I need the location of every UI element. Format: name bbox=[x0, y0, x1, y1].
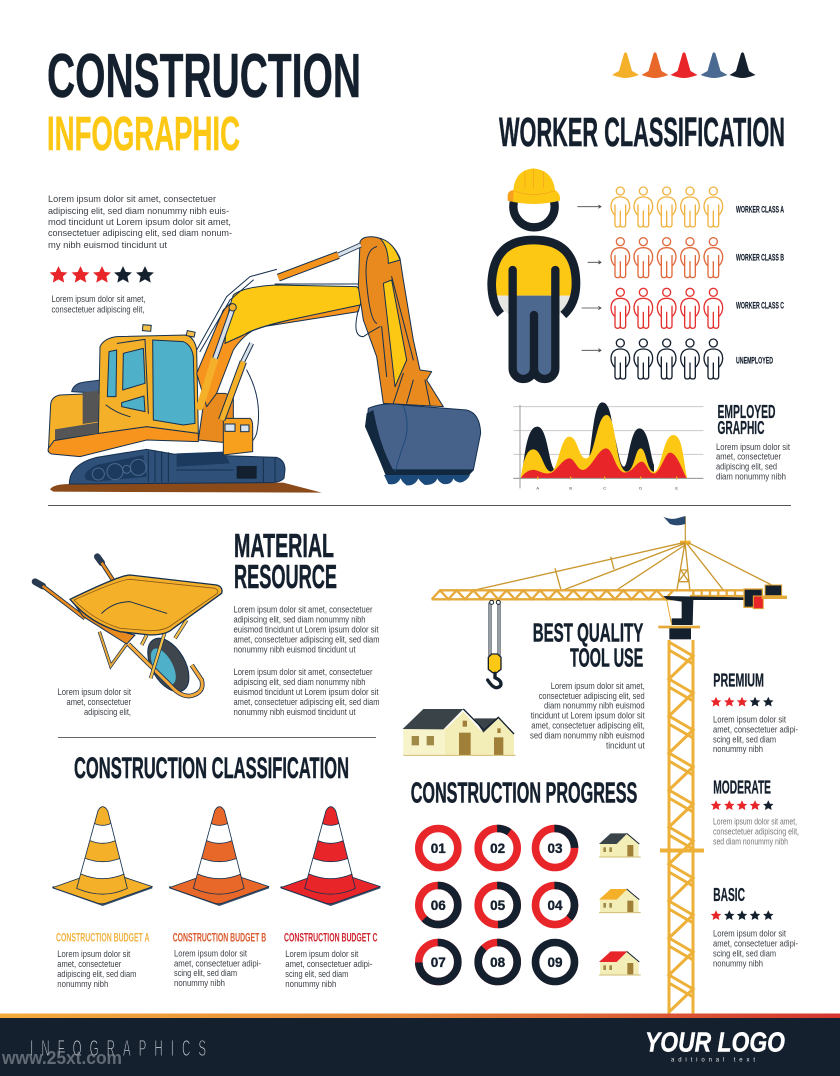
icon: cone budget b bbox=[169, 807, 269, 906]
column: construction budget c bbox=[284, 930, 378, 989]
panel: moderate rating: consectetuer adipiscing elit, bbox=[713, 827, 799, 837]
heading: employed graphic bbox=[718, 402, 776, 438]
chart: employed area graph bbox=[513, 402, 703, 490]
text: employed graphic description bbox=[716, 442, 790, 482]
watermark: www.25xt.com bbox=[1, 1047, 122, 1068]
panel: moderate rating: Lorem ipsum dolor sit amet, bbox=[713, 817, 797, 827]
text: material resource description: adipiscing elit, sed diam nonummy nibh bbox=[234, 677, 366, 687]
illustration: worker figure bbox=[492, 168, 576, 379]
panel: basic rating: nonummy nibh bbox=[713, 959, 763, 969]
text: wheelbarrow caption: amet, consectetuer bbox=[66, 697, 131, 707]
text: material resource description: Lorem ipsum dolor sit amet, consectetuer bbox=[234, 604, 372, 614]
panel: moderate rating: MODERATE bbox=[713, 777, 771, 797]
heading: best quality tool use bbox=[533, 618, 643, 673]
text: wheelbarrow caption: Lorem ipsum dolor sit bbox=[58, 687, 131, 697]
rating caption: consectetuer adipiscing elit, bbox=[52, 304, 144, 314]
panel: premium rating: scing elit, sed diam bbox=[713, 734, 776, 744]
intro text block bbox=[48, 194, 232, 250]
text: material resource description: Lorem ipsum dolor sit amet, consectetuer bbox=[234, 667, 372, 677]
panel: premium rating: amet, consectetuer adipi- bbox=[713, 724, 798, 734]
text: material resource description: nonummy nibh euismod tincidunt ut bbox=[234, 707, 356, 717]
heading: material resource: RESOURCE bbox=[234, 558, 337, 595]
chart: employed area graph: E bbox=[675, 485, 678, 490]
icon: house with red roof bbox=[599, 951, 641, 975]
illustration: tower crane bbox=[432, 516, 787, 1014]
column: construction budget c: CONSTRUCTION BUDGET C bbox=[284, 930, 378, 944]
donut 05 bbox=[478, 886, 517, 924]
text: material resource description: euismod tincidunt ut Lorem ipsum dolor sit bbox=[234, 624, 379, 634]
column: construction budget b: CONSTRUCTION BUDGET B bbox=[173, 930, 266, 944]
intro text block: adipiscing elit, sed diam nonummy nibh euis- bbox=[48, 206, 229, 216]
column: construction budget b: Lorem ipsum dolor sit bbox=[174, 948, 247, 958]
title: construction: CONSTRUCTION bbox=[47, 42, 361, 111]
icon: cone budget a bbox=[53, 807, 152, 906]
donut 07 bbox=[419, 942, 458, 982]
column: construction budget c: nonummy nibh bbox=[285, 979, 336, 989]
text: best quality description: sed diam nonummy nibh euismod bbox=[530, 731, 645, 741]
donut 02: 02 bbox=[490, 841, 505, 856]
text: material resource description: nonummy nibh euismod tincidunt ut bbox=[234, 644, 356, 654]
footer band bbox=[0, 1014, 840, 1076]
panel: moderate rating: sed diam nonummy nibh bbox=[713, 837, 788, 847]
donut chart grid: progress 01 to 09 bbox=[419, 828, 574, 982]
text: material resource description: amet, consectetuer adipiscing elit, sed diam bbox=[234, 697, 380, 707]
text: best quality description: Lorem ipsum dolor sit amet, bbox=[551, 681, 645, 691]
text: best quality description: diam nonummy nibh euismod bbox=[544, 701, 645, 711]
text: material resource description: amet, consectetuer adipiscing elit, sed diam bbox=[234, 634, 380, 644]
chart: employed area graph: A bbox=[536, 485, 539, 490]
donut 01 bbox=[419, 828, 458, 868]
icon row: worker class c bbox=[611, 288, 723, 328]
text: best quality description: consectetuer adipiscing elit, sed bbox=[539, 691, 645, 701]
panel: premium rating: PREMIUM bbox=[713, 671, 764, 691]
logo: YOUR LOGO bbox=[645, 1026, 785, 1058]
panel: basic rating: scing elit, sed diam bbox=[713, 949, 776, 959]
labels: worker classes: WORKER CLASS B bbox=[736, 252, 784, 264]
donut 05: 05 bbox=[490, 898, 506, 913]
chart: employed area graph: B bbox=[569, 485, 572, 490]
chart: employed area graph: D bbox=[639, 485, 642, 490]
text: wheelbarrow caption: adipiscing elit, bbox=[84, 707, 131, 717]
column: construction budget b: amet, consectetuer adipi- bbox=[174, 958, 261, 968]
intro text block: Lorem ipsum dolor sit amet, consectetuer bbox=[48, 194, 216, 204]
panel: premium rating: nonummy nibh bbox=[713, 744, 763, 754]
heading: material resource: MATERIAL bbox=[234, 527, 334, 564]
donut 08 bbox=[478, 942, 517, 982]
column: construction budget b: nonummy nibh bbox=[174, 978, 225, 988]
intro text block: consectetuer adipiscing elit, sed diam nonum- bbox=[48, 228, 232, 238]
heading: construction classification: CONSTRUCTION CLASSIFICATION bbox=[74, 752, 349, 785]
heading: best quality tool use: TOOL USE bbox=[570, 643, 643, 673]
text: employed graphic description: Lorem ipsum dolor sit bbox=[716, 442, 790, 452]
labels: worker classes: UNEMPLOYED bbox=[736, 356, 773, 366]
column: construction budget b bbox=[173, 930, 266, 988]
icon: house with dark roof bbox=[599, 833, 641, 857]
column: construction budget c: scing elit, sed diam bbox=[285, 969, 348, 979]
labels: worker classes: WORKER CLASS C bbox=[736, 300, 784, 312]
text: best quality description bbox=[530, 681, 645, 750]
column: construction budget a: nonummy nibh bbox=[57, 979, 108, 989]
arrows: worker to classes bbox=[577, 205, 601, 352]
text: employed graphic description: amet, consectetuer bbox=[716, 452, 781, 462]
text: best quality description: tincidunt ut Lorem ipsum dolor sit bbox=[531, 711, 645, 721]
donut 06 bbox=[419, 886, 458, 924]
subtitle: infographic: INFOGRAPHIC bbox=[47, 108, 240, 161]
footer label: INFOGRAPHICS bbox=[30, 1036, 206, 1061]
column: construction budget a: CONSTRUCTION BUDGET A bbox=[56, 930, 150, 944]
panel: premium rating: Lorem ipsum dolor sit bbox=[713, 714, 786, 724]
intro text block: my nibh euismod tincidunt ut bbox=[48, 240, 168, 250]
donut 04 bbox=[536, 886, 574, 924]
rating caption bbox=[52, 294, 146, 314]
text: best quality description: tincidunt ut bbox=[606, 740, 645, 750]
icon: house with yellow roof bbox=[599, 889, 641, 913]
heading: material resource bbox=[234, 527, 337, 595]
column: construction budget a: amet, consectetuer bbox=[57, 959, 121, 969]
column: construction budget c: Lorem ipsum dolor sit bbox=[285, 949, 359, 959]
donut 09: 09 bbox=[547, 955, 563, 970]
column: construction budget a bbox=[56, 930, 150, 989]
text: employed graphic description: adipiscing elit, sed bbox=[716, 462, 777, 472]
labels: worker classes bbox=[736, 204, 784, 366]
heading: construction progress: CONSTRUCTION PROGRESS bbox=[411, 777, 637, 809]
donut 02 bbox=[478, 828, 517, 868]
heading: employed graphic: GRAPHIC bbox=[718, 418, 764, 438]
text: best quality description: amet, consectetuer adipiscing elit, bbox=[531, 721, 645, 731]
panel: basic rating: amet, consectetuer adipi- bbox=[713, 939, 798, 949]
illustration: wheelbarrow bbox=[35, 557, 222, 699]
donut 07: 07 bbox=[431, 955, 446, 970]
logo tagline: aditional text bbox=[671, 1058, 755, 1064]
donut 06: 06 bbox=[431, 898, 446, 913]
panel: basic rating: Lorem ipsum dolor sit bbox=[713, 929, 786, 939]
panel: basic rating: BASIC bbox=[713, 885, 745, 905]
column: construction budget a: adipiscing elit, sed diam bbox=[57, 969, 136, 979]
rating caption: Lorem ipsum dolor sit amet, bbox=[52, 294, 146, 304]
text: wheelbarrow caption bbox=[58, 687, 131, 717]
text: material resource description: adipiscing elit, sed diam nonummy nibh bbox=[234, 614, 366, 624]
labels: worker classes: WORKER CLASS A bbox=[736, 204, 784, 216]
illustration: crane hook bbox=[488, 600, 501, 688]
chart: employed area graph: C bbox=[603, 485, 606, 490]
icon row: worker class a bbox=[611, 187, 723, 227]
illustration: excavator bbox=[48, 237, 481, 493]
donut 03: 03 bbox=[547, 841, 563, 856]
icon row: unemployed bbox=[611, 339, 723, 379]
icon row: worker class b bbox=[611, 238, 723, 278]
heading: employed graphic: EMPLOYED bbox=[718, 402, 776, 422]
heading: best quality tool use: BEST QUALITY bbox=[533, 618, 643, 648]
donut 08: 08 bbox=[490, 955, 506, 970]
intro text block: mod tincidunt ut Lorem ipsum dolor sit amet, bbox=[48, 217, 231, 227]
donut 09 bbox=[536, 942, 574, 982]
text: employed graphic description: diam nonummy nibh bbox=[716, 472, 786, 482]
illustration: large houses bbox=[403, 709, 516, 755]
panel: moderate rating bbox=[711, 777, 799, 847]
text: material resource description: euismod tincidunt ut Lorem ipsum dolor sit bbox=[234, 687, 379, 697]
donut 04: 04 bbox=[547, 898, 563, 913]
donut 01: 01 bbox=[431, 841, 446, 856]
column: construction budget c: amet, consectetuer adipi- bbox=[285, 959, 372, 969]
star rating: three of five bbox=[50, 266, 154, 283]
icons: five small cones bbox=[612, 52, 756, 78]
column: construction budget b: scing elit, sed diam bbox=[174, 968, 237, 978]
text: material resource description bbox=[234, 604, 380, 717]
panel: premium rating bbox=[711, 671, 798, 754]
donut 03 bbox=[536, 828, 574, 868]
panel: basic rating bbox=[711, 885, 798, 969]
column: construction budget a: Lorem ipsum dolor sit bbox=[57, 949, 131, 959]
icon: cone budget c bbox=[281, 807, 380, 906]
